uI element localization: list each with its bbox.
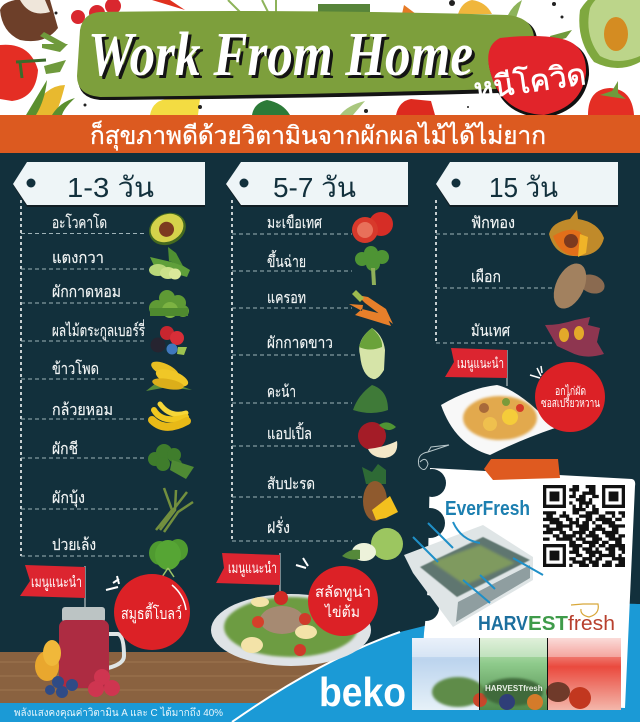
tag: 15 วัน: 15 วัน [489,172,558,203]
icon: coriander [148,444,194,479]
column 1: 1-3 days [13,162,205,577]
EverFresh drawer with airflow arrows [404,522,543,627]
HARVESTfresh logo: EST [528,613,568,635]
orange subtitle band [0,115,640,153]
tag: 15 วัน [436,162,618,207]
product card [404,459,635,708]
icon: cucumber [149,247,190,280]
icon: tomatoes [352,212,393,243]
icon: taro [547,258,607,314]
title banner: Work From Home [88,21,473,89]
list labels: คะน้า [267,383,296,401]
flag: เมนูแนะนำ: เมนูแนะนำ [31,574,82,591]
icon: avocado [144,207,191,251]
list labels: ผักชี [52,440,78,458]
HarvestFresh fridge drawer: HARVESTfresh [485,684,543,693]
red apple badge: หนีโควิด: หนีโควิด [471,56,588,107]
jar drink [59,607,124,688]
red apple badge: หนีโควิด [471,36,589,118]
list labels: ฝรั่ง [267,516,290,537]
list labels: ขึ้นฉ่าย [267,250,306,271]
list labels: แอปเปิ้ล [267,422,312,443]
top white background with vegetables [0,0,640,116]
callout: อกไก่ผัดซอสเปรี้ยวหวาน [530,362,605,432]
flag: เมนูแนะนำ [445,348,507,386]
menu 1: smoothie [20,565,190,698]
callout: สมูธตี้โบลว์ [106,574,190,650]
list labels: ปวยเล้ง [52,536,96,554]
column 3: 15 days [436,162,618,357]
list guides [20,200,22,556]
icon: guava [342,528,403,561]
list labels: อะโวคาโด [52,213,107,232]
menu 3: sweet and sour chicken [441,348,605,455]
fruit: mango [35,640,61,681]
wood table [0,652,640,704]
list labels: แครอท [267,290,306,307]
EverFresh logo: EverFresh [445,498,530,520]
tag: 5-7 วัน: 5-7 วัน [273,172,356,203]
list labels: สับปะรด [267,476,315,493]
list labels: ผักกาดขาว [267,335,333,352]
icon: banana [152,404,187,427]
icon: berries [150,326,187,355]
HARVESTfresh logo [478,604,615,635]
list labels: ฟักทอง [471,215,515,232]
callout: สมูธตี้โบลว์: สมูธตี้โบลว์ [121,602,182,624]
flag: เมนูแนะนำ [20,565,85,610]
list item rules [232,234,362,541]
HARVESTfresh logo: HARV [478,613,529,635]
QR code [543,487,625,565]
callout: สลัดทูน่าไข่ต้ม: สลัดทูน่า [315,584,371,601]
icon: pineapple [362,464,398,521]
column 2: 5-7 days [226,162,408,561]
HarvestFresh fridge drawer [412,638,621,710]
list labels: มะเขือเทศ [267,214,322,232]
plate of chicken [441,385,555,455]
dark main background [0,153,640,653]
flag: เมนูแนะนำ [216,553,280,596]
menu 2: tuna salad [211,553,378,666]
icon: carrots [349,290,393,326]
flag: เมนูแนะนำ: เมนูแนะนำ [228,560,277,577]
callout: อกไก่ผัดซอสเปรี้ยวหวาน: อกไก่ผัด [555,384,586,398]
list labels: กล้วยหอม [52,401,113,419]
beko logo: beko [319,669,406,715]
icon: kale [353,385,388,413]
flag: เมนูแนะนำ: เมนูแนะนำ [457,355,504,372]
callout: สลัดทูน่าไข่ต้ม [296,558,378,636]
plate of salad [211,591,371,666]
list item rules [21,234,158,556]
icon: morning glory [156,488,193,532]
list labels: ข้าวโพด [52,359,99,378]
list labels: มันเทศ [471,323,510,340]
list guides [435,200,437,343]
orange subtitle band: ก็สุขภาพดีด้วยวิตามินจากผักผลไม้ได้ไม่ยาก [90,120,546,151]
icon: corn [146,358,192,392]
footer note: พลังแสงคงคุณค่าวิตามิน A และ C ได้มากถึง 40% [14,706,223,719]
list labels: ผักกาดหอม [52,284,121,301]
icon: pumpkin [549,210,604,257]
tag: 1-3 วัน: 1-3 วัน [67,172,154,203]
list labels: ผลไม้ตระกูลเบอร์รี่ [52,319,145,341]
callout: อกไก่ผัดซอสเปรี้ยวหวาน: ซอสเปรี้ยวหวาน [541,394,600,410]
list labels: เผือก [471,268,501,286]
list labels: ผักบุ้ง [52,489,85,508]
list labels: แตงกวา [52,250,104,267]
HARVESTfresh logo: fresh [568,613,615,635]
icon: lettuce [149,290,189,318]
orange tape [484,459,560,480]
title banner: Work From Home [91,24,476,92]
icon: celery [355,246,389,285]
list item rules [436,234,552,343]
tag: 5-7 วัน [226,162,408,207]
tag: 1-3 วัน [13,162,205,207]
callout: สลัดทูน่าไข่ต้ม: ไข่ต้ม [324,603,360,621]
fruit: blueberries [45,676,78,698]
list guides [231,200,233,541]
paper plane doodle [418,445,449,470]
fruit: raspberries [88,669,120,697]
list labels [471,215,515,340]
list labels [267,214,333,537]
icon: apple [358,422,397,458]
icon: spinach [149,539,188,577]
icon: chinese cabbage [359,328,385,379]
list labels [52,213,145,554]
icon: sweet potato [545,317,604,357]
blue footer and curve [0,604,640,722]
